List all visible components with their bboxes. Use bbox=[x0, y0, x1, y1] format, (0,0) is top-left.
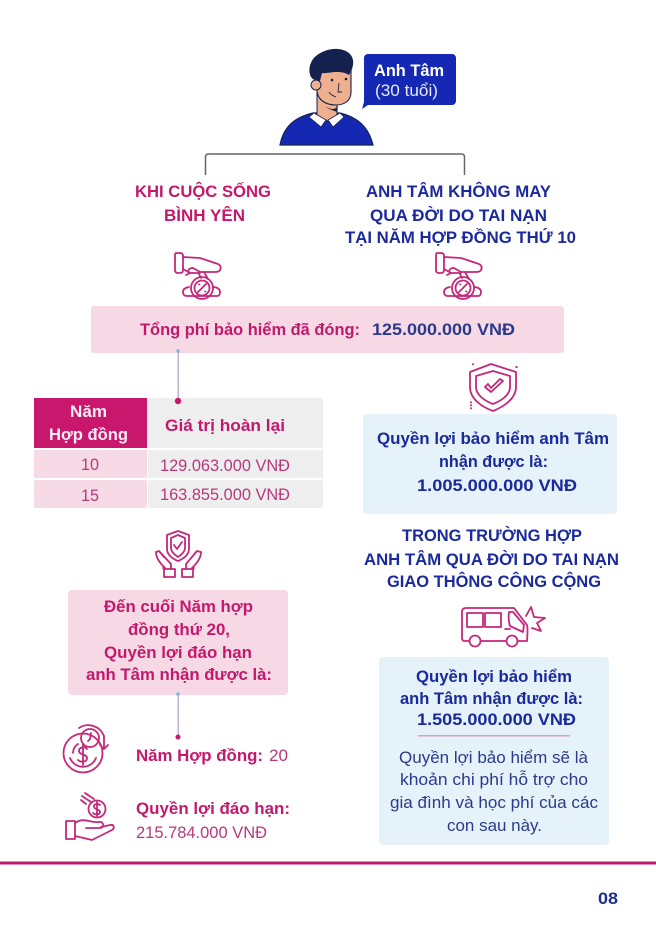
connector: panel to list bbox=[176, 692, 180, 740]
heading: anh Tâm không may qua đời: ANH TÂM KHÔNG MAY bbox=[366, 182, 551, 201]
panel: quyền lợi bảo hiểm 1.005.000.000 bbox=[363, 414, 617, 514]
text: năm hợp đồng: Năm Hợp đồng: bbox=[136, 747, 263, 765]
heading: khi cuộc sống bình yên: KHI CUỘC SỐNG bbox=[135, 181, 271, 201]
panel: quyền lợi 1.505.000.000: 1.505.000.000 VNĐ bbox=[417, 711, 576, 729]
icon: hand and percent coin left bbox=[175, 253, 221, 299]
panel: quyền lợi 1.505.000.000: khoản chi phí hỗ trợ cho bbox=[400, 770, 588, 789]
panel: đến cuối năm hợp đồng: Quyền lợi đáo hạn bbox=[104, 644, 252, 662]
speech bubble: Anh Tâm (30 tuổi): Anh Tâm bbox=[374, 62, 444, 80]
icon: bus collision bbox=[462, 607, 545, 646]
speech bubble: Anh Tâm (30 tuổi) bbox=[362, 54, 456, 109]
panel: quyền lợi bảo hiểm 1.005.000.000: nhận được là: bbox=[439, 453, 548, 471]
panel: tổng phí bảo hiểm: 125.000.000 VNĐ bbox=[372, 321, 515, 339]
icon: shield check bbox=[470, 364, 517, 411]
panel: đến cuối năm hợp đồng: anh Tâm nhận được là: bbox=[86, 666, 272, 684]
heading: khi cuộc sống bình yên bbox=[135, 181, 271, 225]
heading: trường hợp tai nạn giao thông: TRONG TRƯỜNG HỢP bbox=[402, 526, 582, 545]
panel: tổng phí bảo hiểm: Tổng phí bảo hiểm đã đóng: bbox=[140, 321, 360, 339]
icon: hand and percent coin right bbox=[436, 253, 482, 299]
heading: khi cuộc sống bình yên: BÌNH YÊN bbox=[164, 206, 245, 225]
connector: premium to table bbox=[176, 349, 180, 399]
text: năm hợp đồng: 20 bbox=[269, 747, 288, 765]
heading: trường hợp tai nạn giao thông: GIAO THÔNG CÔNG CỘNG bbox=[387, 572, 601, 591]
table: giá trị hoàn lại: 129.063.000 VNĐ bbox=[160, 457, 290, 475]
panel: tổng phí bảo hiểm bbox=[91, 306, 564, 353]
footer rule bbox=[0, 862, 656, 864]
table: giá trị hoàn lại: Giá trị hoàn lại bbox=[165, 417, 285, 435]
character: Anh Tâm portrait bbox=[280, 49, 373, 145]
icon: shield in hands bbox=[156, 531, 201, 577]
table: giá trị hoàn lại: 15 bbox=[81, 487, 99, 505]
table: giá trị hoàn lại: 10 bbox=[81, 456, 99, 474]
panel: đến cuối năm hợp đồng bbox=[68, 590, 288, 695]
table: giá trị hoàn lại bbox=[34, 398, 323, 508]
table: giá trị hoàn lại: Năm bbox=[70, 403, 107, 421]
panel: quyền lợi 1.505.000.000: Quyền lợi bảo hiểm sẽ là bbox=[399, 749, 589, 767]
panel: quyền lợi 1.505.000.000: anh Tâm nhận được là: bbox=[400, 690, 583, 708]
table: giá trị hoàn lại: Hợp đồng bbox=[49, 426, 128, 444]
text: quyền lợi đáo hạn: 215.784.000 VNĐ bbox=[136, 824, 267, 842]
panel: quyền lợi bảo hiểm 1.005.000.000: Quyền lợi bảo hiểm anh Tâm bbox=[377, 430, 609, 448]
page number: 08 bbox=[598, 890, 618, 908]
bracket connector bbox=[206, 154, 464, 175]
table: giá trị hoàn lại: 163.855.000 VNĐ bbox=[160, 486, 290, 504]
heading: trường hợp tai nạn giao thông: ANH TÂM QUA ĐỜI DO TAI NẠN bbox=[364, 550, 619, 569]
panel: đến cuối năm hợp đồng: đồng thứ 20, bbox=[128, 621, 230, 639]
panel: đến cuối năm hợp đồng: Đến cuối Năm hợp bbox=[104, 598, 253, 616]
panel: quyền lợi 1.505.000.000: gia đình và học phí của các bbox=[390, 794, 598, 812]
text: quyền lợi đáo hạn: Quyền lợi đáo hạn: bbox=[136, 800, 290, 818]
heading: anh Tâm không may qua đời bbox=[345, 182, 576, 247]
icon: clock and dollar coin bbox=[64, 725, 108, 772]
text: quyền lợi đáo hạn bbox=[136, 800, 290, 842]
icon: hand receiving dollar coin bbox=[66, 793, 114, 840]
heading: anh Tâm không may qua đời: TẠI NĂM HỢP ĐỒNG THỨ 10 bbox=[345, 228, 576, 247]
panel: quyền lợi 1.505.000.000: Quyền lợi bảo hiểm bbox=[416, 668, 572, 686]
heading: anh Tâm không may qua đời: QUA ĐỜI DO TAI NẠN bbox=[370, 206, 547, 225]
panel: quyền lợi 1.505.000.000 bbox=[379, 657, 609, 845]
panel: quyền lợi 1.505.000.000: con sau này. bbox=[447, 817, 542, 835]
heading: trường hợp tai nạn giao thông bbox=[364, 526, 619, 591]
speech bubble: Anh Tâm (30 tuổi): (30 tuổi) bbox=[375, 82, 438, 100]
panel: quyền lợi bảo hiểm 1.005.000.000: 1.005.000.000 VNĐ bbox=[417, 477, 577, 495]
